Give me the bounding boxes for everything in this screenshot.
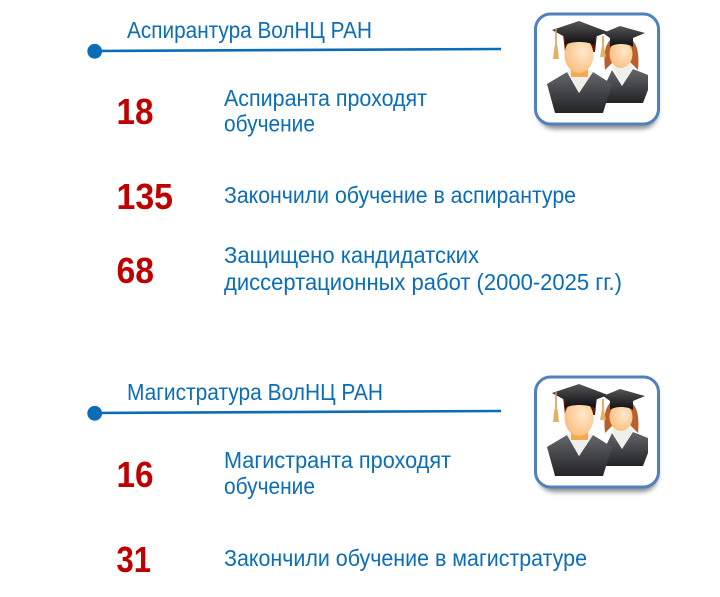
stat: 135: Закончили обучение в аспирантуре	[224, 182, 576, 208]
stat: 31	[116, 539, 587, 580]
stat: 16: Магистранта проходят	[224, 447, 451, 473]
heading: Аспирантура ВолНЦ РАН: Аспирантура ВолНЦ РАН	[127, 17, 372, 43]
stat: 135: 135	[116, 176, 173, 217]
heading: Магистратура ВолНЦ РАН: Магистратура ВолНЦ РАН	[127, 379, 383, 405]
stat: 68: диссертационных работ (2000-2025 гг.)	[224, 269, 622, 295]
stat: 68: Защищено кандидатских	[224, 242, 479, 268]
stat: 18: обучение	[224, 110, 315, 136]
stat: 18	[116, 85, 427, 136]
heading rule with dot	[87, 44, 501, 59]
stat: 16	[116, 447, 451, 499]
icon: graduates	[536, 14, 658, 129]
stat: 135	[116, 176, 576, 217]
stat: 16: 16	[116, 454, 154, 495]
stat: 31: Закончили обучение в магистратуре	[224, 545, 587, 571]
stat: 16: обучение	[224, 473, 315, 499]
panel: Аспирантура	[87, 14, 659, 295]
heading rule with dot	[87, 406, 501, 421]
stat: 18: Аспиранта проходят	[224, 85, 427, 111]
stat: 31: 31	[116, 539, 151, 580]
stat: 68	[116, 242, 622, 295]
panel: Магистратура	[87, 377, 659, 580]
stat: 68: 68	[116, 250, 154, 291]
stat: 18: 18	[116, 91, 154, 132]
icon: graduates	[536, 377, 658, 492]
